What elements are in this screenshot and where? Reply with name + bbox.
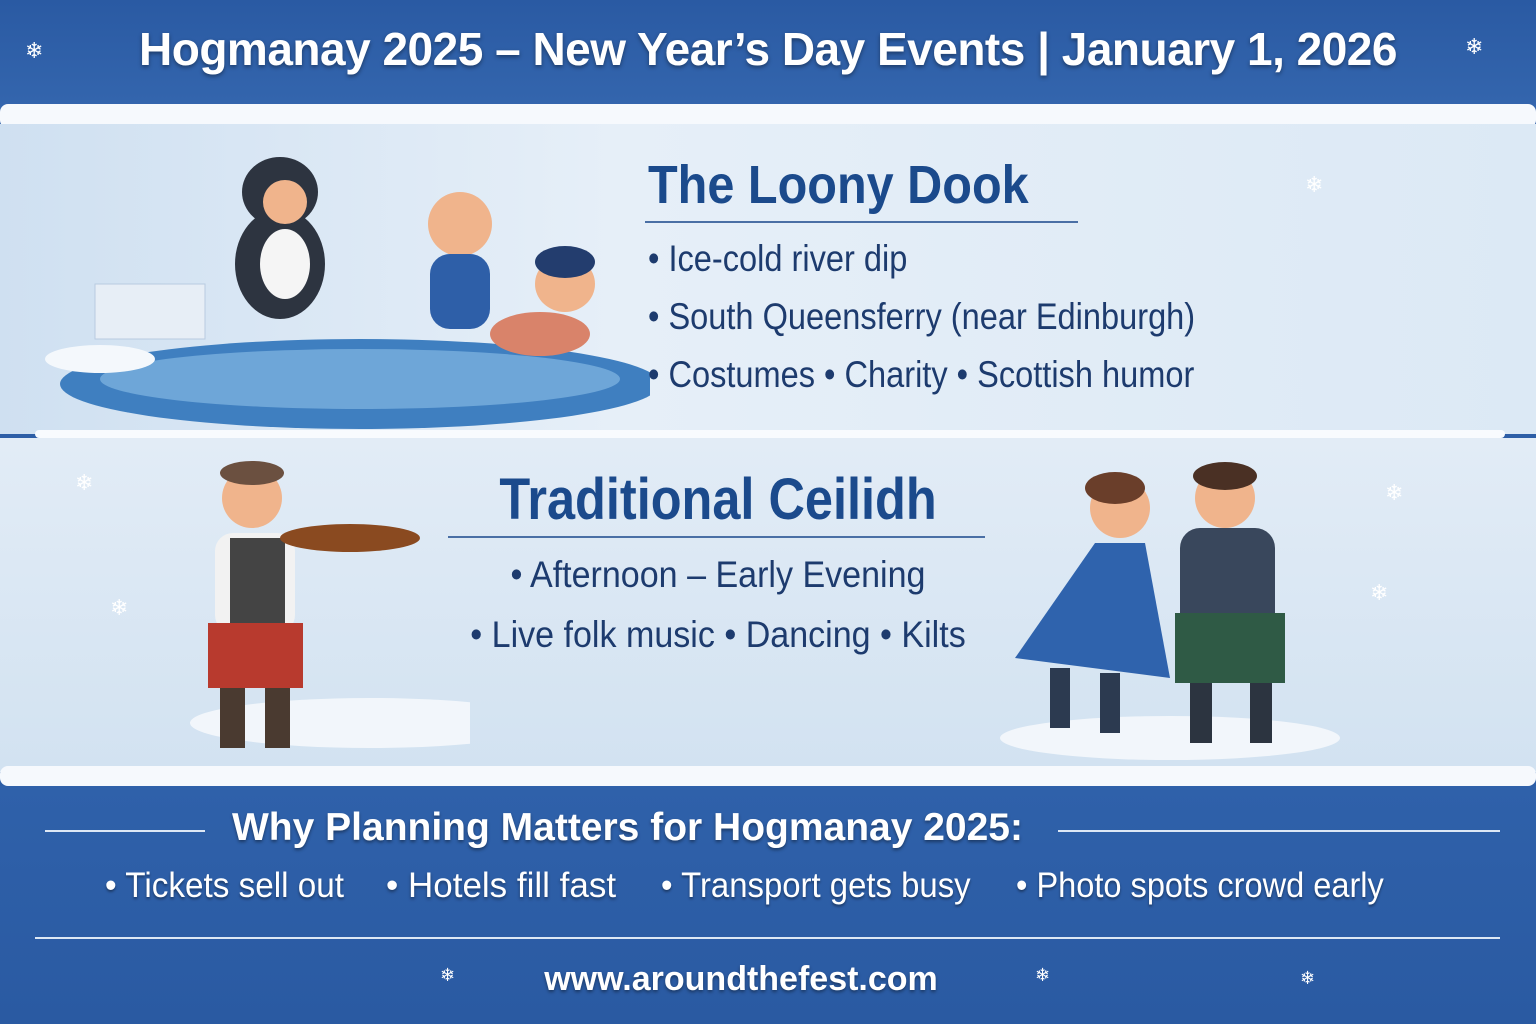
illustration: swimmers xyxy=(45,157,650,429)
text: ❄ xyxy=(1300,968,1315,988)
text: ❄ xyxy=(440,965,455,985)
text: ❄ xyxy=(1035,965,1050,985)
bullets: loony dook: • Ice-cold river dip xyxy=(648,238,907,279)
bullets: loony dook: • South Queensferry (near Edinburgh) xyxy=(648,296,1195,337)
title: Hogmanay 2025 – New Year’s Day Events | January 1, 2026 xyxy=(139,23,1397,75)
snowflakes: ❄ xyxy=(25,38,43,63)
bullets: loony dook: • Costumes • Charity • Scottish humor xyxy=(648,354,1194,395)
bullets: planning: • Photo spots crowd early xyxy=(1016,866,1384,905)
divider xyxy=(35,430,1505,438)
bullets: ceilidh: • Afternoon – Early Evening xyxy=(510,554,925,595)
bottom panel xyxy=(0,786,1536,1024)
illustration: dancers xyxy=(1000,462,1340,760)
torn white edge bottom xyxy=(0,766,1536,786)
heading: traditional ceilidh: Traditional Ceilidh xyxy=(499,467,937,532)
heading: the loony dook: The Loony Dook xyxy=(648,155,1029,215)
bullets: ceilidh xyxy=(470,554,966,655)
torn white edge top xyxy=(0,104,1536,128)
top banner xyxy=(0,0,1536,110)
bullets: planning: • Transport gets busy xyxy=(661,866,971,905)
text: ❄ xyxy=(110,595,128,620)
panel: ceilidh xyxy=(0,438,1536,772)
bullets: planning: • Hotels fill fast xyxy=(386,866,616,905)
heading: why planning matters: Why Planning Matters for Hogmanay 2025: xyxy=(232,806,1023,849)
text: ❄ xyxy=(1370,580,1388,605)
bullets: planning xyxy=(105,866,1384,908)
bullets: ceilidh: • Live folk music • Dancing • Kilts xyxy=(470,614,966,655)
text: ❄ xyxy=(75,470,93,495)
url: www.aroundthefest.com xyxy=(544,960,938,998)
panel: loony dook xyxy=(0,124,1536,434)
illustration: fiddler xyxy=(190,461,470,748)
text: ❄ xyxy=(1465,34,1483,59)
bullets: planning: • Tickets sell out xyxy=(105,866,344,905)
bullets: loony dook xyxy=(648,238,1195,395)
text: ❄ xyxy=(1385,480,1403,505)
text: ❄ xyxy=(1305,172,1323,197)
